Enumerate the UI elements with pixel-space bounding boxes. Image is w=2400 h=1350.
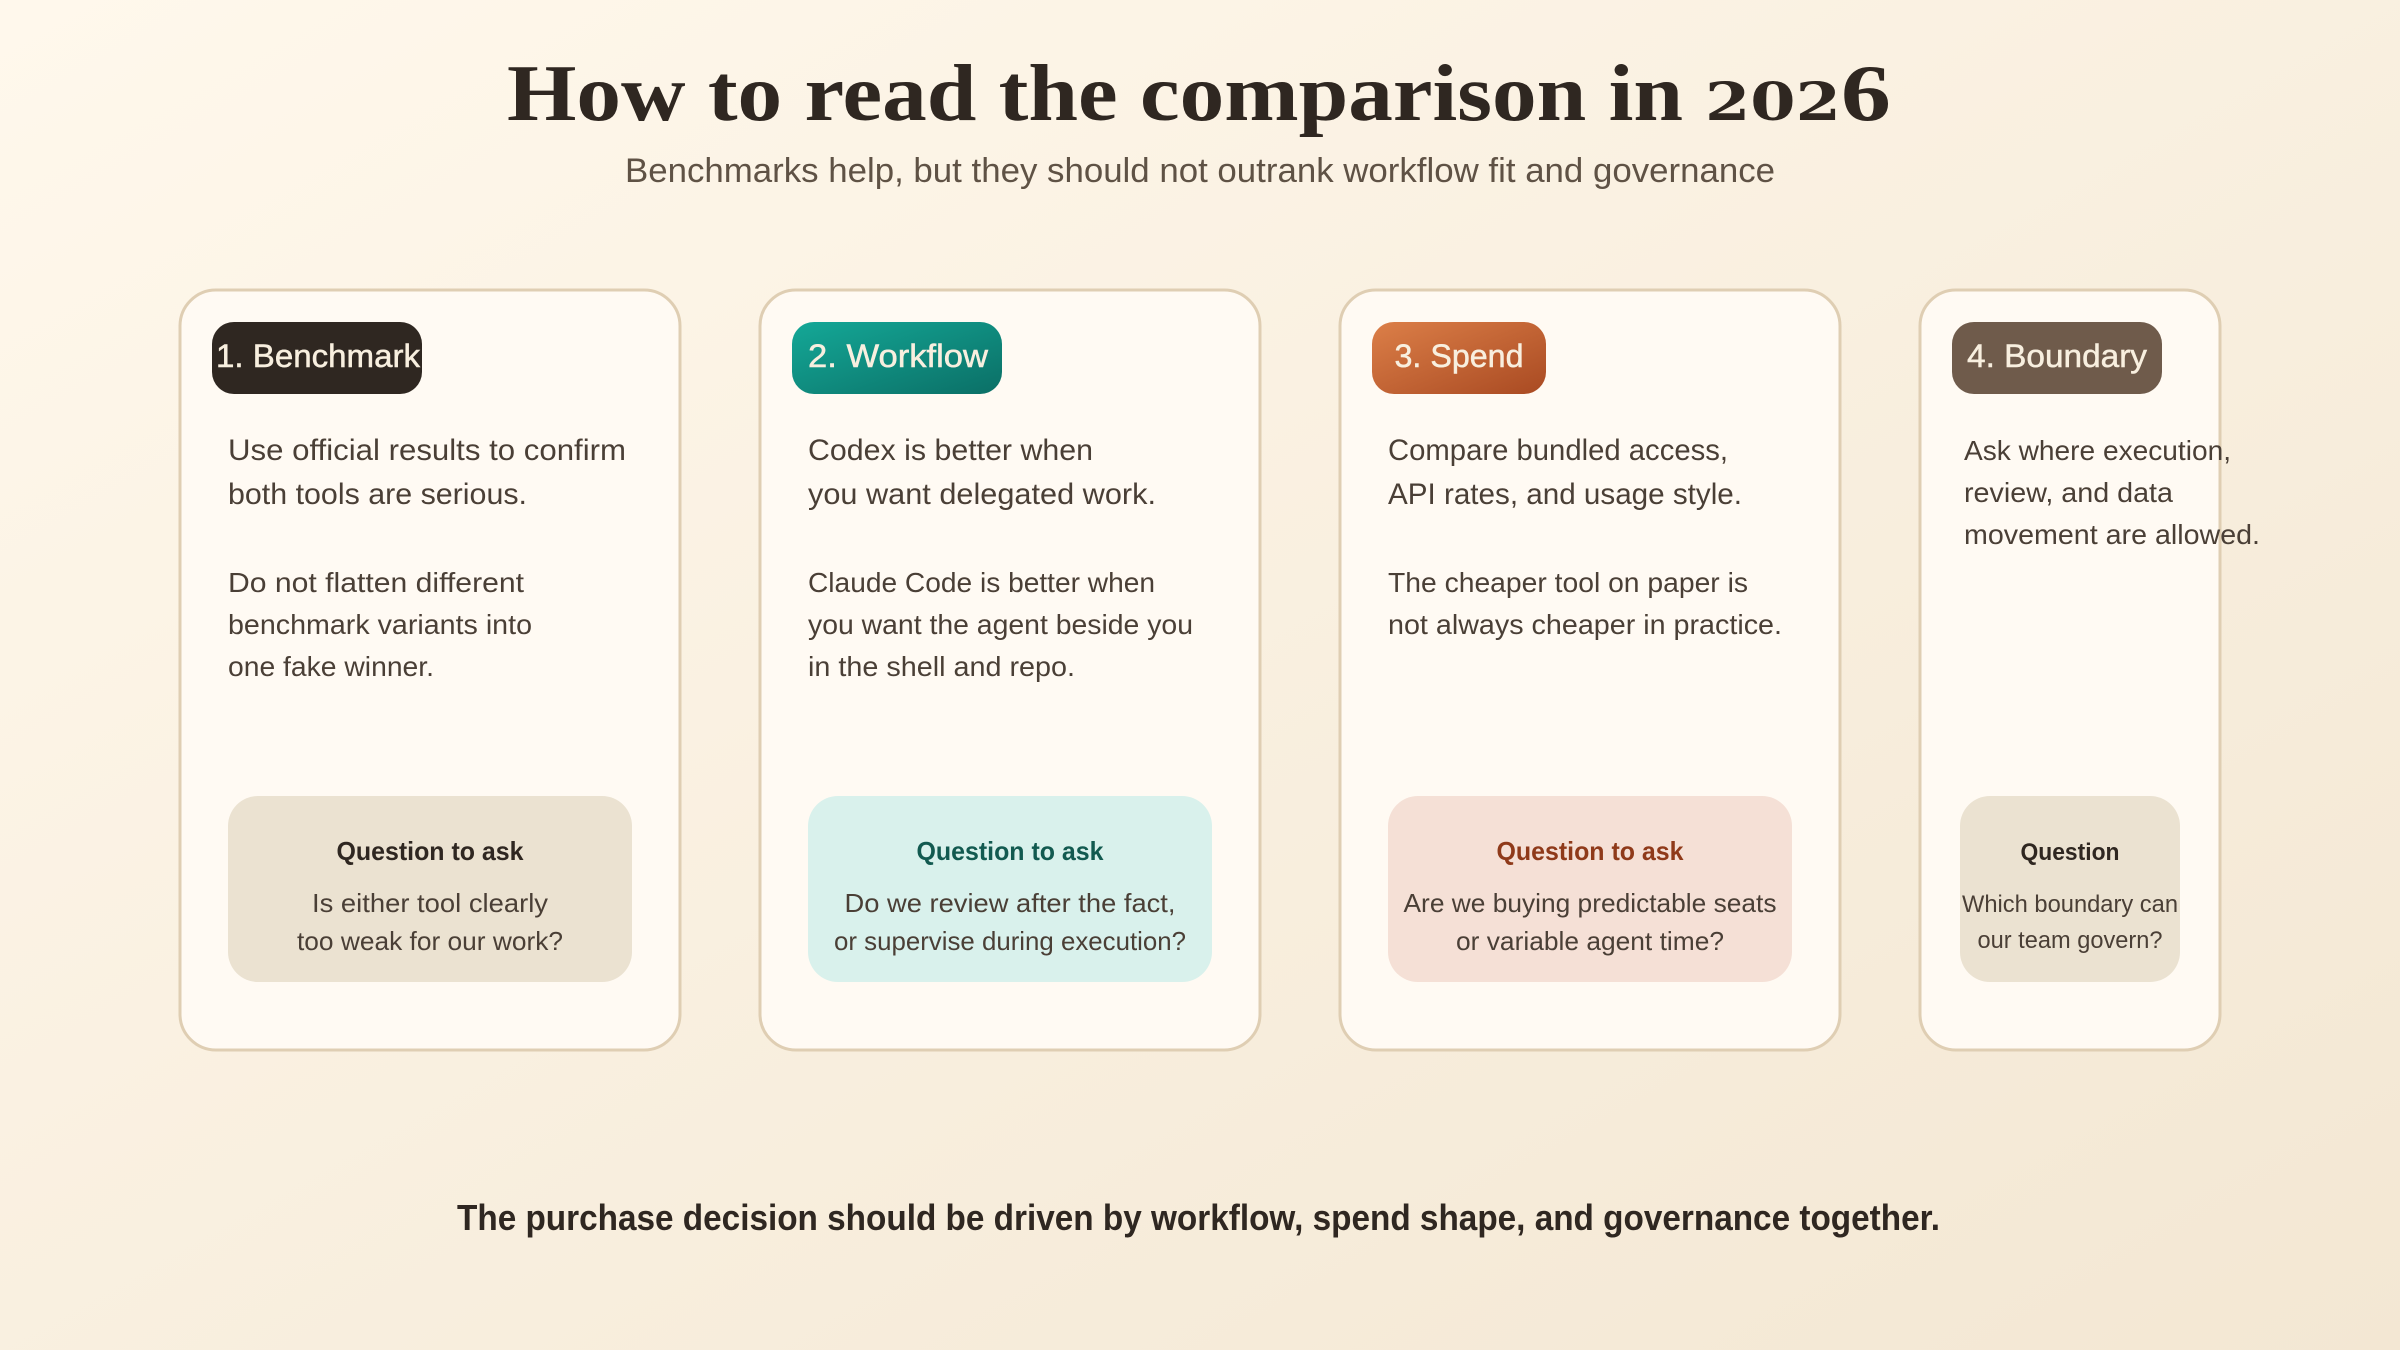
panel: 3. Spend <box>1340 290 1840 1050</box>
text block: boundary lead: movement are allowed. <box>1964 519 2260 550</box>
text block: boundary lead: Ask where execution, <box>1964 435 2231 466</box>
callout: workflow question: Question to ask <box>916 836 1104 866</box>
callout: benchmark question: too weak for our work? <box>297 926 563 956</box>
text block: spend detail: The cheaper tool on paper is <box>1388 567 1748 598</box>
text block: benchmark detail: Do not flatten different <box>228 567 524 598</box>
subtitle: Benchmarks help, but they should not outrank workflow fit and governance <box>625 152 1775 190</box>
text block: benchmark lead <box>228 434 626 511</box>
callout: workflow question <box>808 796 1212 982</box>
callout: benchmark question <box>228 796 632 982</box>
badge: 4. Boundary <box>1952 322 2162 394</box>
text block: workflow lead <box>808 434 1156 511</box>
text block: boundary lead <box>1964 435 2260 550</box>
badge: 4. Boundary: 4. Boundary <box>1967 338 2147 374</box>
text block: spend detail: not always cheaper in practice. <box>1388 609 1782 640</box>
callout: boundary question <box>1960 796 2180 982</box>
text block: boundary lead: review, and data <box>1964 477 2173 508</box>
text block: spend lead: Compare bundled access, <box>1388 434 1728 467</box>
callout: spend question: Question to ask <box>1496 836 1684 866</box>
text block: spend lead <box>1388 434 1742 511</box>
title: 202 6 <box>1705 50 1891 138</box>
badge: 1. Benchmark <box>212 322 422 394</box>
text block: workflow detail <box>808 567 1193 682</box>
text block: workflow detail: you want the agent beside you <box>808 609 1193 640</box>
callout: workflow question: or supervise during execution? <box>834 926 1186 956</box>
text block: spend lead: API rates, and usage style. <box>1388 478 1742 511</box>
badge: 2. Workflow <box>792 322 1002 394</box>
text block: spend detail <box>1388 567 1782 640</box>
badge: 1. Benchmark: 1. Benchmark <box>216 338 421 374</box>
callout: workflow question: Do we review after the fact, <box>844 888 1176 918</box>
panel: 1. Benchmark <box>180 290 680 1050</box>
text block: benchmark detail: one fake winner. <box>228 651 434 682</box>
panel: 4. Boundary <box>1920 290 2260 1050</box>
text block: workflow lead: you want delegated work. <box>808 478 1156 511</box>
text block: workflow lead: Codex is better when <box>808 434 1093 467</box>
callout: spend question: Are we buying predictable seats <box>1404 888 1776 918</box>
badge: 3. Spend <box>1372 322 1546 394</box>
text block: workflow detail: in the shell and repo. <box>808 651 1075 682</box>
panel: 2. Workflow <box>760 290 1260 1050</box>
text block: benchmark detail <box>228 567 532 682</box>
callout: spend question <box>1388 796 1792 982</box>
badge: 3. Spend: 3. Spend <box>1394 338 1524 374</box>
text block: workflow detail: Claude Code is better when <box>808 567 1155 598</box>
callout: spend question: or variable agent time? <box>1456 926 1724 956</box>
text block: benchmark lead: Use official results to confirm <box>228 434 626 467</box>
title: How to read the comparison in <box>507 50 1683 138</box>
badge: 2. Workflow: 2. Workflow <box>808 338 989 374</box>
callout: boundary question: Question <box>2020 839 2120 866</box>
text block: benchmark lead: both tools are serious. <box>228 478 527 511</box>
text block: benchmark detail: benchmark variants into <box>228 609 532 640</box>
callout: boundary question: our team govern? <box>1978 927 2162 954</box>
callout: benchmark question: Question to ask <box>336 836 524 866</box>
footer takeaway: The purchase decision should be driven by workflow, spend shape, and governance together. <box>457 1197 1940 1238</box>
callout: benchmark question: Is either tool clearly <box>312 888 548 918</box>
callout: boundary question: Which boundary can <box>1962 891 2178 918</box>
